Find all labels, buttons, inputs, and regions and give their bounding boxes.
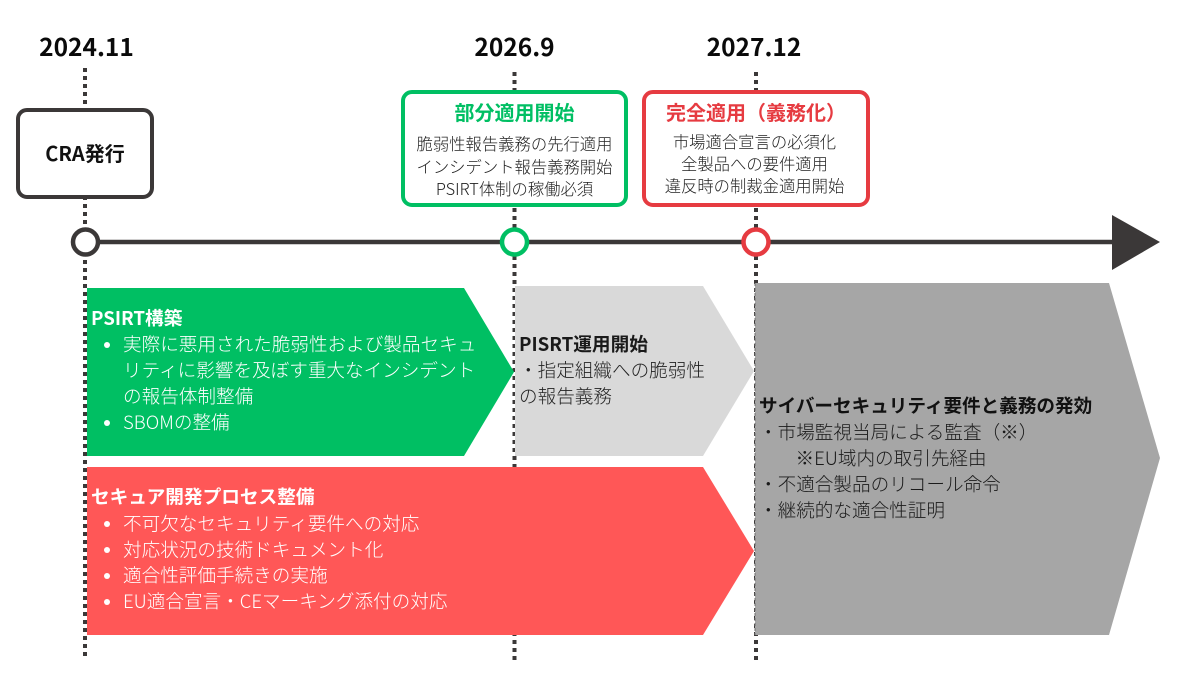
milestone marker: 2027.12	[744, 230, 768, 254]
arrow: gray PISRT運用開始: PISRT運用開始	[519, 330, 648, 357]
arrow: dark gray サイバーセキュリティ要件と義務の発効: ・市場監視当局による監査（※）	[759, 418, 1037, 445]
callout: CRA発行: CRA発行	[45, 138, 125, 167]
date: 2026.9: 2026.9	[474, 29, 555, 64]
arrow: dark gray サイバーセキュリティ要件と義務の発効: サイバーセキュリティ要件と義務の発効	[759, 392, 1092, 418]
arrow: red セキュア開発プロセス整備: 不可欠なセキュリティ要件への対応	[123, 510, 419, 536]
callout: 部分適用開始: PSIRT体制の稼働必須	[436, 176, 593, 200]
arrow: dark gray サイバーセキュリティ要件と義務の発効: ・継続的な適合性証明	[759, 496, 945, 523]
arrow: green PSIRT構築: 実際に悪用された脆弱性および製品セキュ	[123, 330, 476, 357]
arrow: gray PISRT運用開始	[515, 286, 754, 456]
date: 2024.11: 2024.11	[39, 29, 134, 64]
arrow: gray PISRT運用開始: の報告義務	[519, 382, 612, 409]
arrow: green PSIRT構築: リティに影響を及ぼす重大なインシデント	[123, 356, 475, 383]
callout: 部分適用開始: 脆弱性報告義務の先行適用	[417, 131, 612, 155]
arrow: green PSIRT構築	[87, 288, 514, 456]
callout: 部分適用開始: インシデント報告義務開始	[417, 154, 612, 178]
arrow: green PSIRT構築: PSIRT構築	[91, 304, 183, 331]
callout: 完全適用（義務化）	[644, 92, 868, 205]
milestone marker: 2026.9	[502, 230, 527, 254]
arrow: green PSIRT構築: の報告体制整備	[123, 382, 253, 409]
arrow: dark gray サイバーセキュリティ要件と義務の発効: ・不適合製品のリコール命令	[759, 470, 1001, 497]
callout: 完全適用（義務化）: 完全適用（義務化）	[666, 97, 846, 126]
milestone marker: 2024.11	[73, 230, 98, 254]
arrow: red セキュア開発プロセス整備: EU適合宣言・CEマーキング添付の対応	[123, 587, 447, 614]
callout: 完全適用（義務化）: 違反時の制裁金適用開始	[665, 173, 844, 197]
callout: 完全適用（義務化）: 全製品への要件適用	[681, 151, 828, 175]
date: 2027.12: 2027.12	[707, 29, 801, 64]
arrow: red セキュア開発プロセス整備: 対応状況の技術ドキュメント化	[123, 536, 383, 562]
timeline axis arrow	[100, 215, 1160, 270]
callout: 部分適用開始	[403, 92, 626, 205]
arrow: red セキュア開発プロセス整備	[87, 467, 754, 635]
arrow: red セキュア開発プロセス整備: 適合性評価手続きの実施	[123, 561, 328, 588]
arrow: dark gray サイバーセキュリティ要件と義務の発効: ※EU域内の取引先経由	[796, 444, 987, 471]
arrow: red セキュア開発プロセス整備: セキュア開発プロセス整備	[91, 482, 315, 510]
dotted guide lines	[85, 68, 756, 660]
arrow: green PSIRT構築: SBOMの整備	[123, 408, 230, 435]
arrow: dark gray サイバーセキュリティ要件と義務の発効	[755, 283, 1160, 635]
arrow: gray PISRT運用開始: ・指定組織への脆弱性	[519, 356, 705, 383]
callout: 部分適用開始: 部分適用開始	[454, 97, 574, 126]
callout: CRA発行	[18, 110, 152, 197]
callout: 完全適用（義務化）: 市場適合宣言の必須化	[673, 129, 836, 153]
